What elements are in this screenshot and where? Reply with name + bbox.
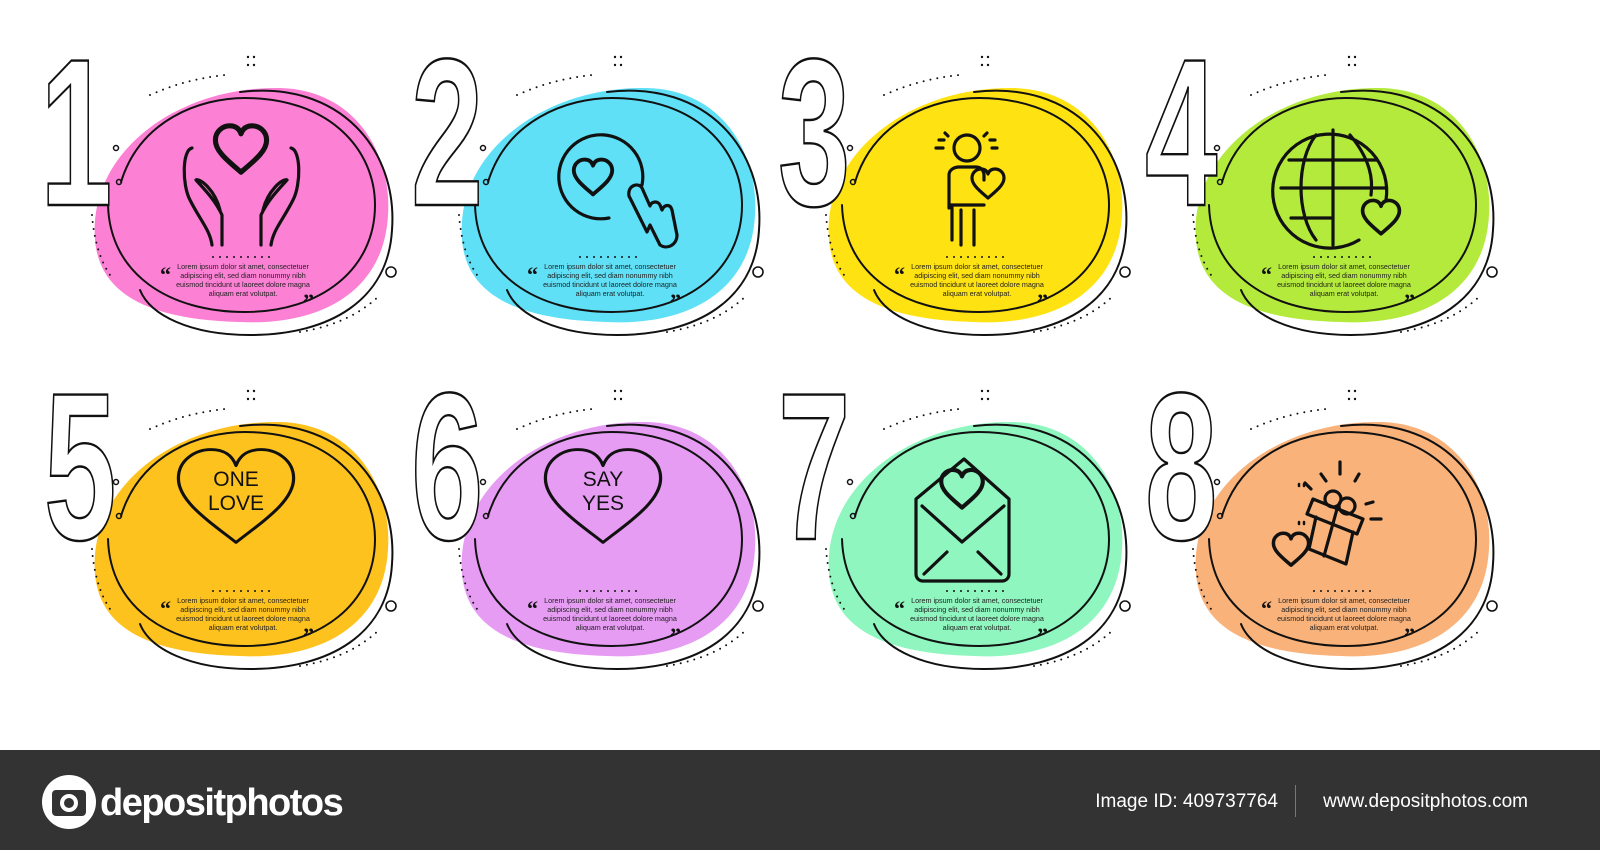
number 5: 5 <box>44 350 116 585</box>
icon: hands heart <box>184 126 299 245</box>
icon: heart say yes <box>545 450 661 542</box>
panel: 7 love letter <box>778 350 1130 669</box>
url: www.depositphotos.com <box>1322 791 1528 812</box>
number 8: 8 <box>1145 350 1217 585</box>
number 1: 1 <box>40 16 112 251</box>
icon: person heart <box>936 133 1004 245</box>
panel: 2 heart click <box>411 16 763 335</box>
logo <box>42 775 343 829</box>
panel: 1 hands heart <box>40 16 396 335</box>
panel: 6 say yes <box>411 350 763 669</box>
footer bar <box>0 750 1600 850</box>
icon: heart button <box>559 135 677 247</box>
panel: 4 globe heart <box>1145 16 1497 335</box>
panel: 5 one love <box>44 350 396 669</box>
number 4: 4 <box>1145 16 1217 251</box>
number 6: 6 <box>411 350 483 585</box>
icon: heart say yes: SAY <box>583 468 623 491</box>
panel: 8 gift heart <box>1145 350 1497 669</box>
number 7: 7 <box>778 350 850 585</box>
icon: envelope heart <box>916 459 1009 581</box>
logo: depositphotos <box>100 782 343 824</box>
icon: heart one love <box>178 450 294 542</box>
icon: globe heart <box>1273 130 1399 248</box>
image id: Image ID: 409737764 <box>1095 791 1278 812</box>
icon: heart one love: ONE <box>213 468 259 491</box>
icon: heart one love: LOVE <box>208 492 264 515</box>
number 2: 2 <box>411 16 483 251</box>
icon: gift heart <box>1273 462 1381 565</box>
icon: heart say yes: YES <box>582 492 624 515</box>
panel: 3 person heart <box>778 16 1130 335</box>
number 3: 3 <box>778 16 850 251</box>
